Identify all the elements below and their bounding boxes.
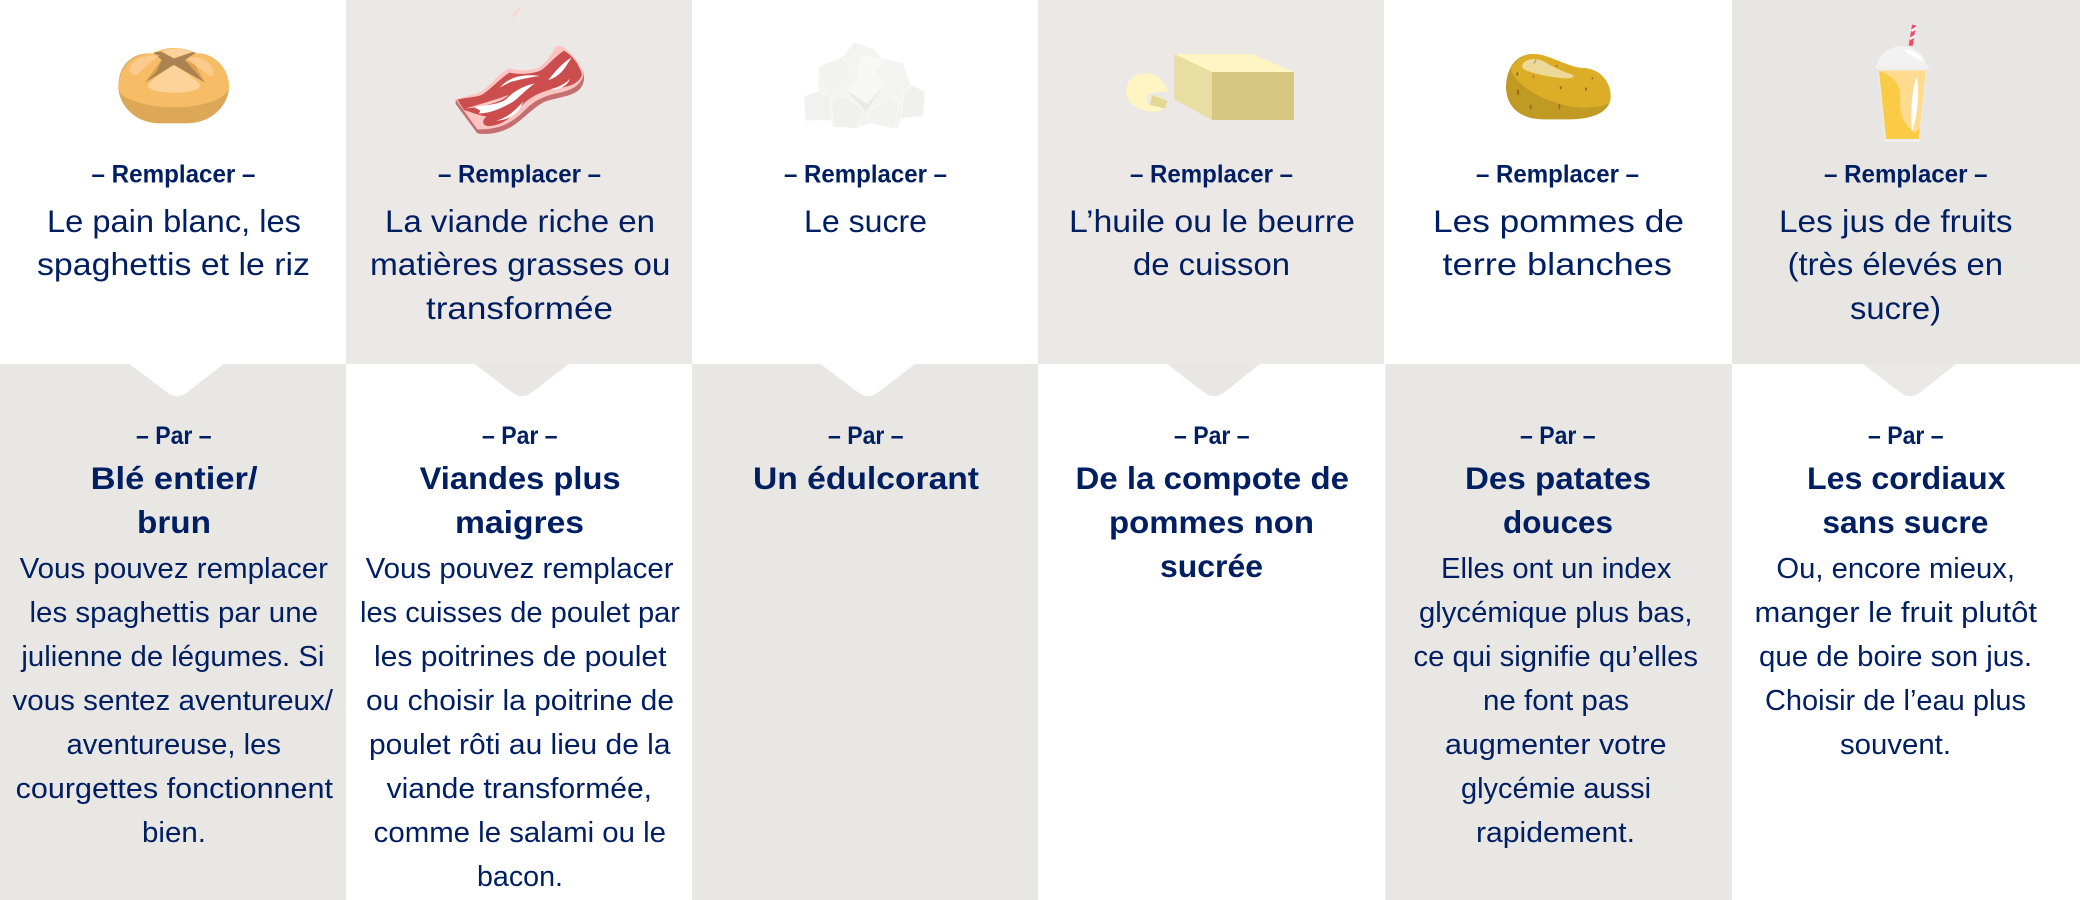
heading: replacement: Un édulcorant bbox=[753, 460, 980, 496]
heading: replacement bbox=[1465, 460, 1651, 540]
heading: replacement: Des patates bbox=[1465, 460, 1651, 496]
panel: bottom cordial bbox=[1732, 364, 2080, 900]
heading: replacement: Les cordiaux bbox=[1807, 460, 2006, 496]
heading: replacement: Blé entier/ bbox=[91, 460, 258, 496]
heading: replacement: maigres bbox=[455, 504, 584, 540]
heading: replacement: brun bbox=[137, 504, 211, 540]
body text bbox=[1754, 553, 2037, 761]
label: par: – Par – bbox=[1520, 422, 1596, 450]
icon: sugar cubes bbox=[804, 43, 925, 128]
body text: julienne de légumes. Si bbox=[20, 641, 324, 673]
heading: replacement: pommes non bbox=[1109, 504, 1314, 540]
heading: replacement: sans sucre bbox=[1822, 504, 1988, 540]
panel: bottom whole wheat bbox=[0, 364, 346, 900]
label: remplacer: – Remplacer – bbox=[92, 160, 256, 188]
notch arrow bbox=[1863, 364, 1956, 396]
food to replace bbox=[1433, 203, 1684, 282]
label: par: – Par – bbox=[136, 422, 212, 450]
icon: butter bbox=[1126, 54, 1294, 120]
food to replace: matières grasses ou bbox=[370, 246, 670, 282]
panel: bottom sweetener bbox=[692, 364, 1038, 900]
label: par: – Par – bbox=[1868, 422, 1944, 450]
body text: bien. bbox=[142, 817, 206, 849]
body text bbox=[360, 553, 681, 893]
label: remplacer: – Remplacer – bbox=[1824, 160, 1988, 188]
food to replace: sucre) bbox=[1850, 290, 1941, 326]
body text: glycémique plus bas, bbox=[1419, 597, 1692, 629]
food to replace: La viande riche en bbox=[385, 203, 655, 239]
panel: top meat bbox=[346, 0, 692, 364]
label: par: – Par – bbox=[482, 422, 558, 450]
food to replace bbox=[1779, 203, 2013, 326]
body text: Vous pouvez remplacer bbox=[366, 553, 674, 585]
body text: ou choisir la poitrine de bbox=[366, 685, 674, 717]
body text: Vous pouvez remplacer bbox=[20, 553, 329, 585]
icon: bacon bbox=[456, 7, 584, 134]
panel: top sugar bbox=[692, 0, 1038, 364]
heading: replacement bbox=[1807, 460, 2006, 540]
food to replace: Le pain blanc, les bbox=[47, 203, 301, 239]
body text: aventureuse, les bbox=[66, 729, 281, 761]
heading: replacement: douces bbox=[1503, 504, 1613, 540]
body text: manger le fruit plutôt bbox=[1754, 597, 2037, 629]
body text: bacon. bbox=[477, 861, 563, 893]
food to replace: Le sucre bbox=[804, 203, 927, 239]
heading: replacement: De la compote de bbox=[1076, 460, 1349, 496]
body text: Choisir de l’eau plus bbox=[1765, 685, 2026, 717]
body text: vous sentez aventureux/ bbox=[12, 685, 333, 717]
body text: ce qui signifie qu’elles bbox=[1414, 641, 1698, 673]
heading: replacement bbox=[91, 460, 258, 540]
icon: juice cup bbox=[1875, 25, 1929, 142]
body text: Ou, encore mieux, bbox=[1776, 553, 2015, 585]
body text: comme le salami ou le bbox=[374, 817, 666, 849]
food to replace: Les jus de fruits bbox=[1779, 203, 2013, 239]
food to replace bbox=[37, 203, 310, 282]
label: remplacer: – Remplacer – bbox=[1476, 160, 1639, 188]
body text: Elles ont un index bbox=[1441, 553, 1672, 585]
food to replace: de cuisson bbox=[1133, 246, 1290, 282]
panel: top potato bbox=[1384, 0, 1732, 364]
notch arrow bbox=[820, 364, 915, 396]
body text: que de boire son jus. bbox=[1759, 641, 2032, 673]
heading: replacement bbox=[1076, 460, 1349, 584]
body text: augmenter votre bbox=[1445, 729, 1667, 761]
notch arrow bbox=[130, 364, 224, 396]
body text: glycémie aussi bbox=[1461, 773, 1651, 805]
column 2: meat bbox=[346, 0, 692, 900]
food to replace bbox=[370, 203, 670, 326]
panel: bottom sweet potato bbox=[1386, 364, 1732, 900]
label: remplacer: – Remplacer – bbox=[1130, 160, 1293, 188]
heading: replacement bbox=[420, 460, 621, 540]
column 1: bread bbox=[0, 0, 346, 900]
body text: les poitrines de poulet bbox=[374, 641, 667, 673]
column 5: potato bbox=[1384, 0, 1732, 900]
column 6: juice bbox=[1732, 0, 2080, 900]
notch arrow bbox=[1167, 364, 1260, 396]
heading: replacement: sucrée bbox=[1160, 548, 1263, 584]
body text bbox=[1414, 553, 1698, 849]
panel: bottom compote bbox=[1038, 364, 1386, 900]
body text: courgettes fonctionnent bbox=[16, 773, 333, 805]
body text: souvent. bbox=[1840, 729, 1951, 761]
food to replace: L’huile ou le beurre bbox=[1069, 203, 1355, 239]
panel: top juice bbox=[1732, 0, 2080, 364]
body text: les cuisses de poulet par bbox=[360, 597, 681, 629]
body text: rapidement. bbox=[1476, 817, 1635, 849]
food to replace bbox=[1069, 203, 1355, 282]
icon: bread bbox=[118, 48, 229, 123]
body text bbox=[12, 553, 333, 849]
panel: top butter bbox=[1038, 0, 1384, 364]
column 3: sugar bbox=[692, 0, 1038, 900]
body text: viande transformée, bbox=[387, 773, 652, 805]
body text: ne font pas bbox=[1483, 685, 1629, 717]
column 4: butter bbox=[1038, 0, 1386, 900]
panel: top bread bbox=[0, 0, 346, 364]
notch arrow bbox=[474, 364, 568, 396]
body text: les spaghettis par une bbox=[30, 597, 318, 629]
icon: potato bbox=[1506, 54, 1611, 119]
food to replace: spaghettis et le riz bbox=[37, 246, 310, 282]
panel: bottom lean meat bbox=[346, 364, 692, 900]
label: par: – Par – bbox=[1174, 422, 1250, 450]
label: par: – Par – bbox=[828, 422, 904, 450]
body text: poulet rôti au lieu de la bbox=[369, 729, 671, 761]
food to replace: transformée bbox=[426, 290, 613, 326]
label: remplacer: – Remplacer – bbox=[784, 160, 947, 188]
food to replace: terre blanches bbox=[1442, 246, 1672, 282]
food to replace: Les pommes de bbox=[1433, 203, 1684, 239]
food to replace: (très élevés en bbox=[1788, 246, 2003, 282]
label: remplacer: – Remplacer – bbox=[438, 160, 601, 188]
heading: replacement: Viandes plus bbox=[420, 460, 621, 496]
